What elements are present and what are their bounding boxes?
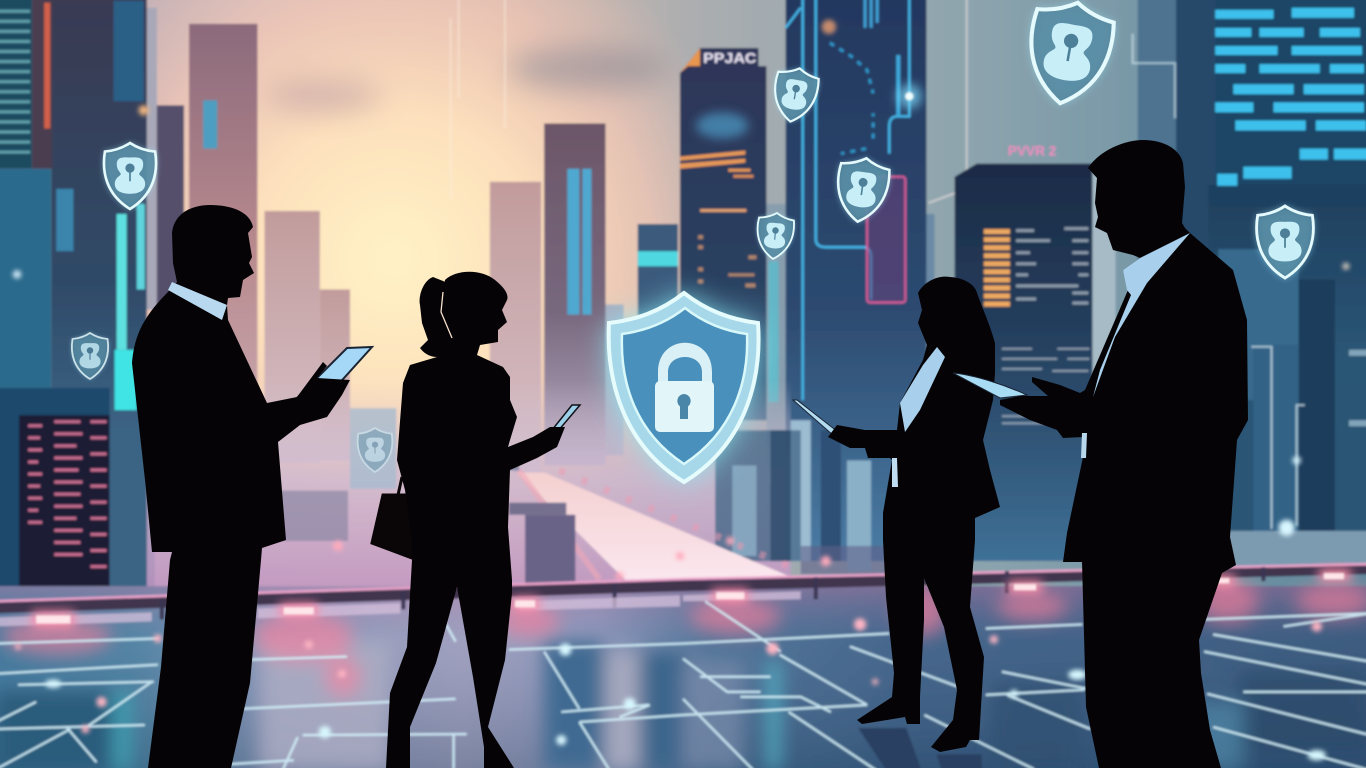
icon: tablet held by right man [953,373,1027,398]
icon: tablet held by left man [297,347,372,398]
right-hand blue towers [1133,0,1366,571]
floor reflections [0,642,1366,768]
floating security shields [72,0,1313,472]
pink node lights [15,618,1322,733]
sign: PVVR 2: PVVR 2 [1008,143,1056,159]
circuit floor [0,579,1366,768]
pink glow patches [1,579,1366,697]
icon: large central padlock shield [609,293,759,482]
icon: shield lower left [72,333,108,379]
icon: tablet held by right woman [793,400,838,436]
tower with PPJAC sign [680,48,766,420]
silhouette: man with tablet, right [1000,140,1248,768]
icon: shield far right [1257,206,1313,278]
sign: PPJAC: PPJAC [703,50,757,67]
left-hand towers [0,0,257,488]
icon: shield above tablet [769,65,821,125]
silhouette: woman with phone and handbag [372,272,580,768]
dark data tower with PVVR 2 sign [955,143,1116,571]
icon: shield upper left [104,143,156,209]
icon: handbag [372,477,415,558]
railing with pink lights [0,564,1366,627]
icon: faint shield near woman [358,428,392,472]
icon: large shield top right [1021,0,1117,110]
icon: phone held by woman [552,405,580,431]
silhouette: man with tablet, left [132,205,372,768]
silhouette: woman in jacket with tablet [793,277,1000,752]
low block with pink data screens [0,388,155,597]
icon: small shield by tower [755,212,795,260]
reflection of woman's boots [858,728,982,768]
tall navy tower with circuit lines [766,0,967,571]
circuit traces [0,601,1366,768]
pale strips under rail [0,578,1198,626]
hazy mid-ground city and road [147,380,962,601]
distant towers, centre [265,123,678,474]
icon: shield on navy tower [833,155,891,225]
bright node lights [45,644,1326,760]
